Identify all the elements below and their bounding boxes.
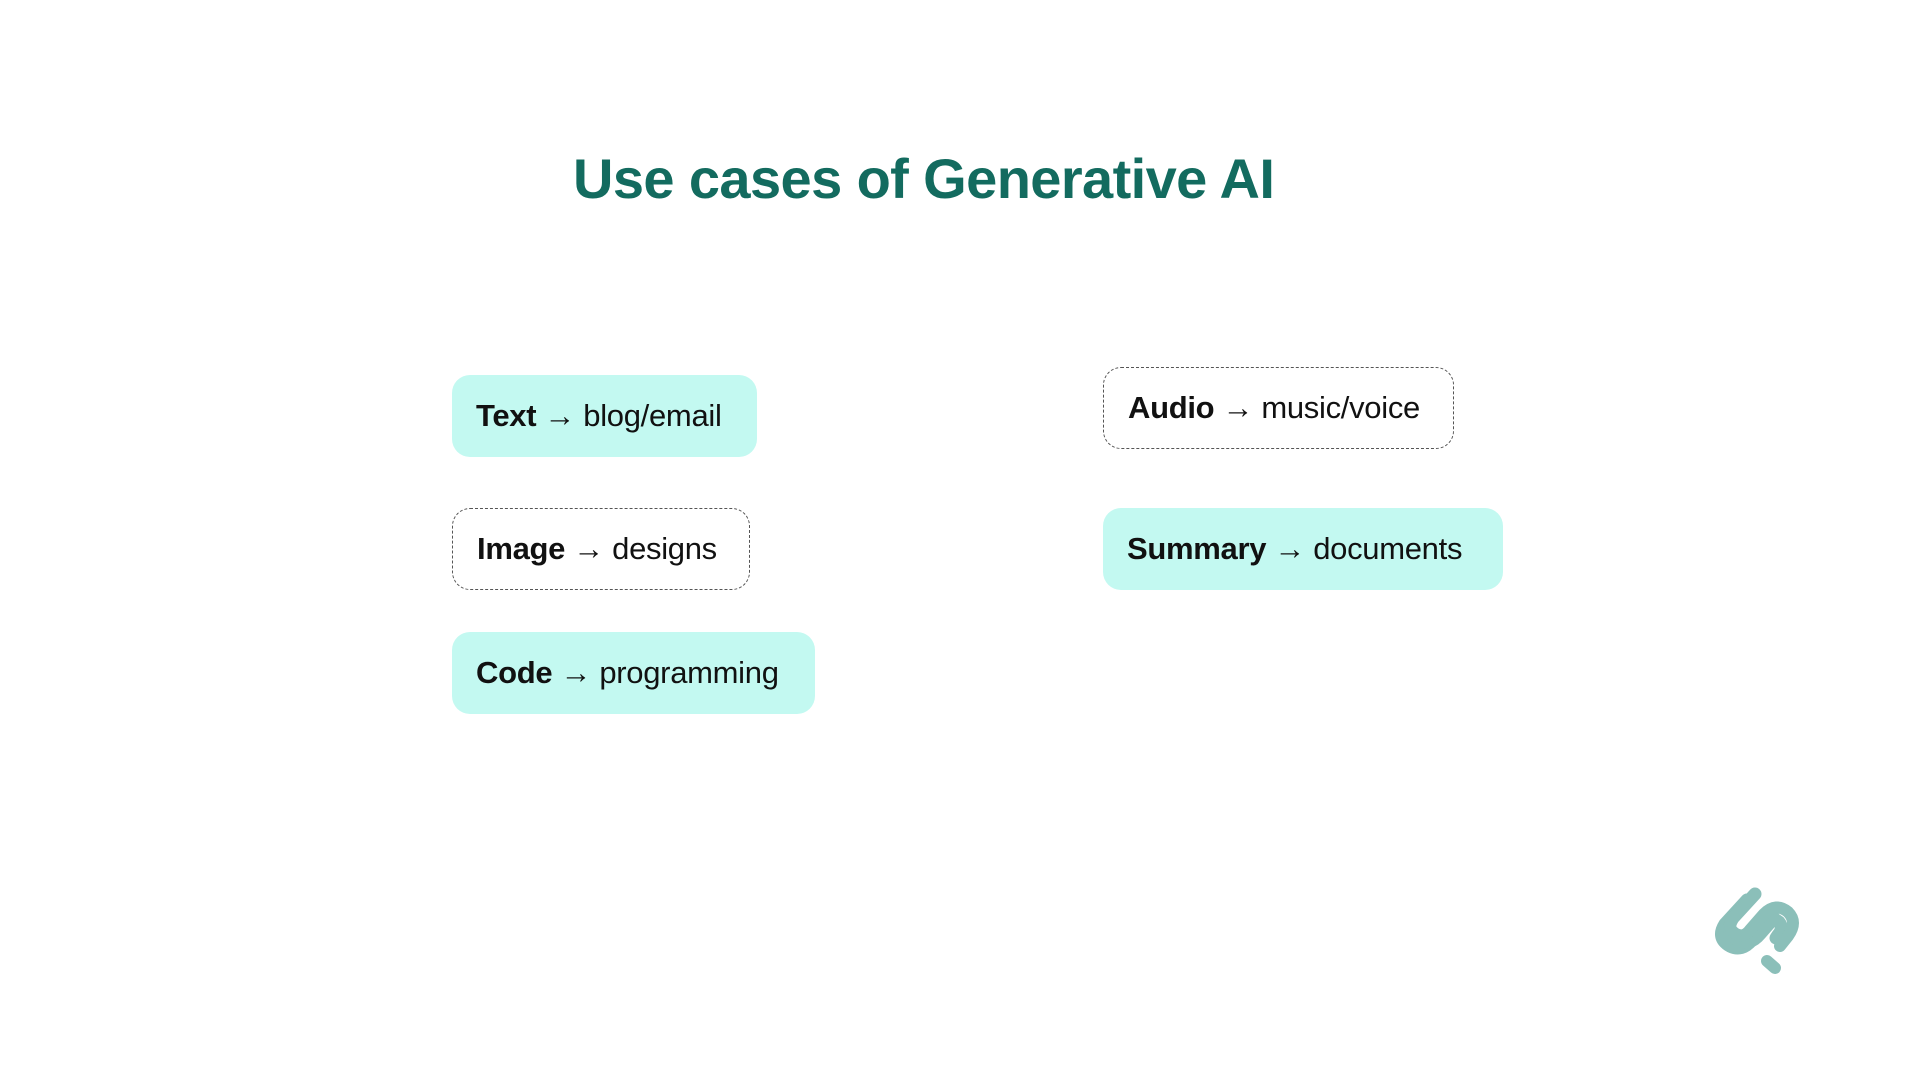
card: audio: → music/voice [1222,390,1420,425]
card: code: Code [476,655,552,690]
card: code: → programming [560,655,779,690]
card: code [452,632,815,714]
card: image: Image [477,531,565,566]
card: text: → blog/email [544,398,722,433]
card: summary: → documents [1274,531,1462,566]
card: text [452,375,757,457]
card: summary: Summary [1127,531,1266,566]
card: image [452,508,750,590]
card: summary [1103,508,1503,590]
card: text: Text [476,398,536,433]
card: audio: Audio [1128,390,1214,425]
card: image: → designs [573,531,717,566]
title: Use cases of Generative AI [573,147,1274,210]
icon: logo [1715,888,1799,974]
card: audio [1103,367,1454,449]
